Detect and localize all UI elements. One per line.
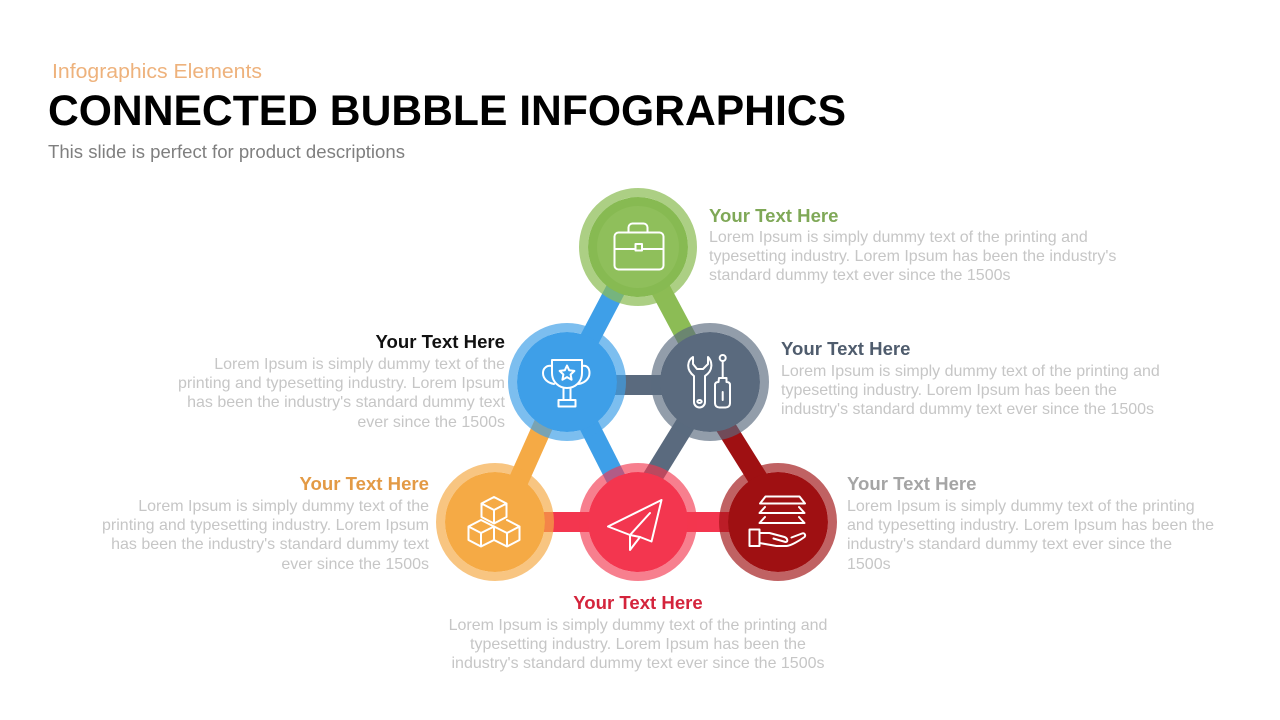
text block: green: Your Text Here [709, 205, 839, 226]
text block: slate: Lorem Ipsum is simply dummy text of the printing and [781, 363, 1160, 380]
connectors [495, 247, 785, 522]
text block: blue [178, 331, 506, 431]
text block: orange [102, 473, 430, 573]
text block: blue: ever since the 1500s [357, 414, 505, 431]
bubble: blue trophy [512, 328, 622, 436]
text block: orange: Lorem Ipsum is simply dummy text of the [138, 498, 429, 515]
text block: slate: Your Text Here [781, 338, 911, 359]
text block: green: typesetting industry. Lorem Ipsum has been the industry's [709, 248, 1116, 265]
text block: green [709, 205, 1116, 284]
icon: paper plane [608, 500, 662, 550]
text block: dark red: industry's standard dummy text ever since the [847, 536, 1172, 553]
icon: hand holding layers [750, 496, 805, 546]
text block: orange: Your Text Here [299, 473, 429, 494]
text block: red [449, 592, 827, 672]
text block: dark red: Your Text Here [847, 473, 977, 494]
text block: dark red [847, 473, 1214, 573]
text block: blue: Your Text Here [375, 331, 505, 352]
text block: green: standard dummy text ever since the 1500s [709, 267, 1010, 284]
title: CONNECTED BUBBLE INFOGRAPHICS [48, 88, 846, 135]
text block: red: typesetting industry. Lorem Ipsum has been the [470, 636, 806, 653]
text block: blue: printing and typesetting industry. Lorem Ipsum [178, 375, 505, 392]
eyebrow label: Infographics Elements [52, 61, 262, 83]
bubble: dark red hand with layers [724, 468, 832, 576]
text block: orange: printing and typesetting industry. Lorem Ipsum [102, 517, 429, 534]
text block: red: Your Text Here [573, 592, 703, 613]
bubble: slate tools [656, 328, 764, 436]
text block: slate: typesetting industry. Lorem Ipsum has been the [781, 382, 1117, 399]
subtitle: This slide is perfect for product descriptions [48, 142, 405, 162]
text block: blue: Lorem Ipsum is simply dummy text of the [214, 356, 505, 373]
bubble: orange cubes [440, 468, 550, 576]
text block: green: Lorem Ipsum is simply dummy text of the printing and [709, 229, 1088, 246]
icon: briefcase [614, 224, 664, 270]
text block: blue: has been the industry's standard dummy text [187, 394, 506, 411]
text block: red: industry's standard dummy text ever since the 1500s [451, 655, 825, 672]
text block: orange: has been the industry's standard dummy text [111, 536, 430, 553]
text block: dark red: and typesetting industry. Lorem Ipsum has been the [847, 517, 1214, 534]
text block: slate: industry's standard dummy text ever since the 1500s [781, 401, 1154, 418]
icon: wrench and screwdriver [688, 355, 730, 408]
icon: trophy [543, 360, 590, 406]
icon: cubes [468, 497, 520, 546]
bubble: green briefcase [584, 192, 692, 302]
bubble: red paper plane [584, 468, 692, 576]
text block: red: Lorem Ipsum is simply dummy text of the printing and [449, 617, 827, 634]
text block: dark red: Lorem Ipsum is simply dummy text of the printing [847, 498, 1195, 515]
text block: orange: ever since the 1500s [281, 556, 429, 573]
text block: dark red: 1500s [847, 556, 891, 573]
text block: slate [781, 338, 1160, 418]
